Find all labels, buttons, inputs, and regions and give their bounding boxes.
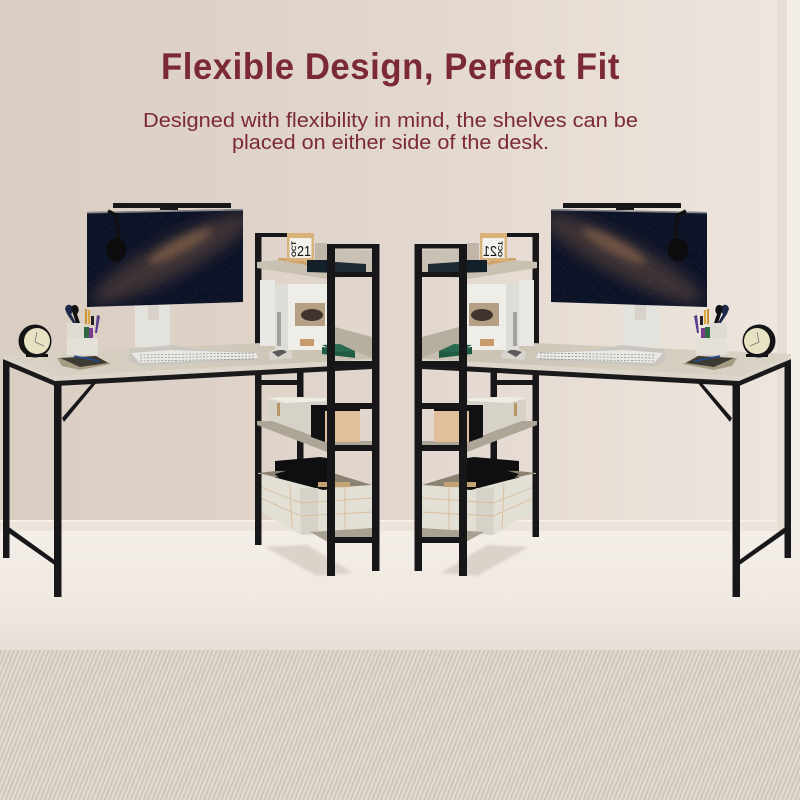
black organizer in basket — [275, 457, 327, 490]
right bottom shelf — [422, 528, 484, 543]
right green tray — [439, 344, 472, 358]
fabric basket — [258, 459, 372, 535]
jar — [315, 243, 327, 260]
notebook and pen — [57, 356, 111, 370]
pen cup — [65, 305, 100, 355]
left tower rear leg — [255, 474, 262, 545]
right monitor light bar — [563, 203, 681, 210]
right upper shelf — [422, 260, 537, 279]
shelf tower front frame — [327, 244, 380, 576]
right desk legs — [697, 362, 791, 597]
floor — [0, 531, 800, 651]
right shelf tower front frame — [414, 244, 467, 576]
right floor shadow — [441, 545, 529, 576]
right desk with shelves (mirror image) — [414, 200, 791, 597]
window frame at right — [777, 0, 800, 532]
desk legs — [3, 362, 97, 597]
wall background — [0, 0, 800, 532]
right pen cup — [694, 305, 729, 355]
right black organizer — [467, 457, 519, 490]
upper shelf — [257, 260, 372, 279]
subtitle: placed on either side of the desk. — [232, 131, 549, 154]
floor shadow — [265, 545, 353, 576]
right jar — [467, 243, 479, 260]
middle shelf — [257, 421, 372, 452]
monitor — [84, 200, 260, 347]
right middle shelf — [422, 421, 537, 452]
right headphones — [668, 211, 688, 262]
subtitle: Designed with flexibility in mind, the shelves can be — [143, 109, 638, 132]
baseboard — [0, 520, 777, 531]
calendar block: 21 — [297, 243, 311, 260]
right fabric basket — [422, 459, 536, 535]
mouse — [268, 347, 293, 360]
dark box on shelf — [307, 260, 366, 274]
right tabletop — [422, 343, 791, 386]
headphones — [106, 211, 126, 262]
right books — [467, 280, 534, 350]
calendar block — [278, 233, 314, 268]
monitor light bar — [113, 203, 231, 210]
subtitle — [143, 109, 638, 154]
white storage box — [268, 397, 327, 433]
right dark box — [428, 260, 487, 274]
right calendar block — [480, 233, 516, 268]
right monitor — [534, 200, 710, 347]
right notebook — [683, 356, 737, 370]
tabletop — [3, 343, 372, 386]
books — [260, 280, 327, 350]
keyboard on book — [129, 345, 258, 366]
right mouse — [501, 347, 526, 360]
green tray — [322, 344, 355, 358]
right shelf panels — [422, 249, 461, 360]
right dark and tan box — [434, 405, 483, 442]
right white storage box — [467, 397, 526, 433]
rug — [0, 650, 800, 800]
bottom shelf — [310, 528, 372, 543]
dark and tan box — [311, 405, 360, 442]
right keyboard — [536, 345, 665, 366]
clock — [18, 324, 52, 358]
shelf tower rear frame — [255, 233, 304, 474]
left desk with shelves — [3, 200, 380, 597]
calendar block: OCT — [291, 241, 298, 257]
right tower rear leg — [532, 474, 539, 537]
lower-back shelf panels — [333, 249, 372, 360]
right shelf tower rear frame — [490, 233, 539, 474]
right clock — [742, 324, 776, 358]
title: Flexible Design, Perfect Fit — [161, 46, 620, 87]
